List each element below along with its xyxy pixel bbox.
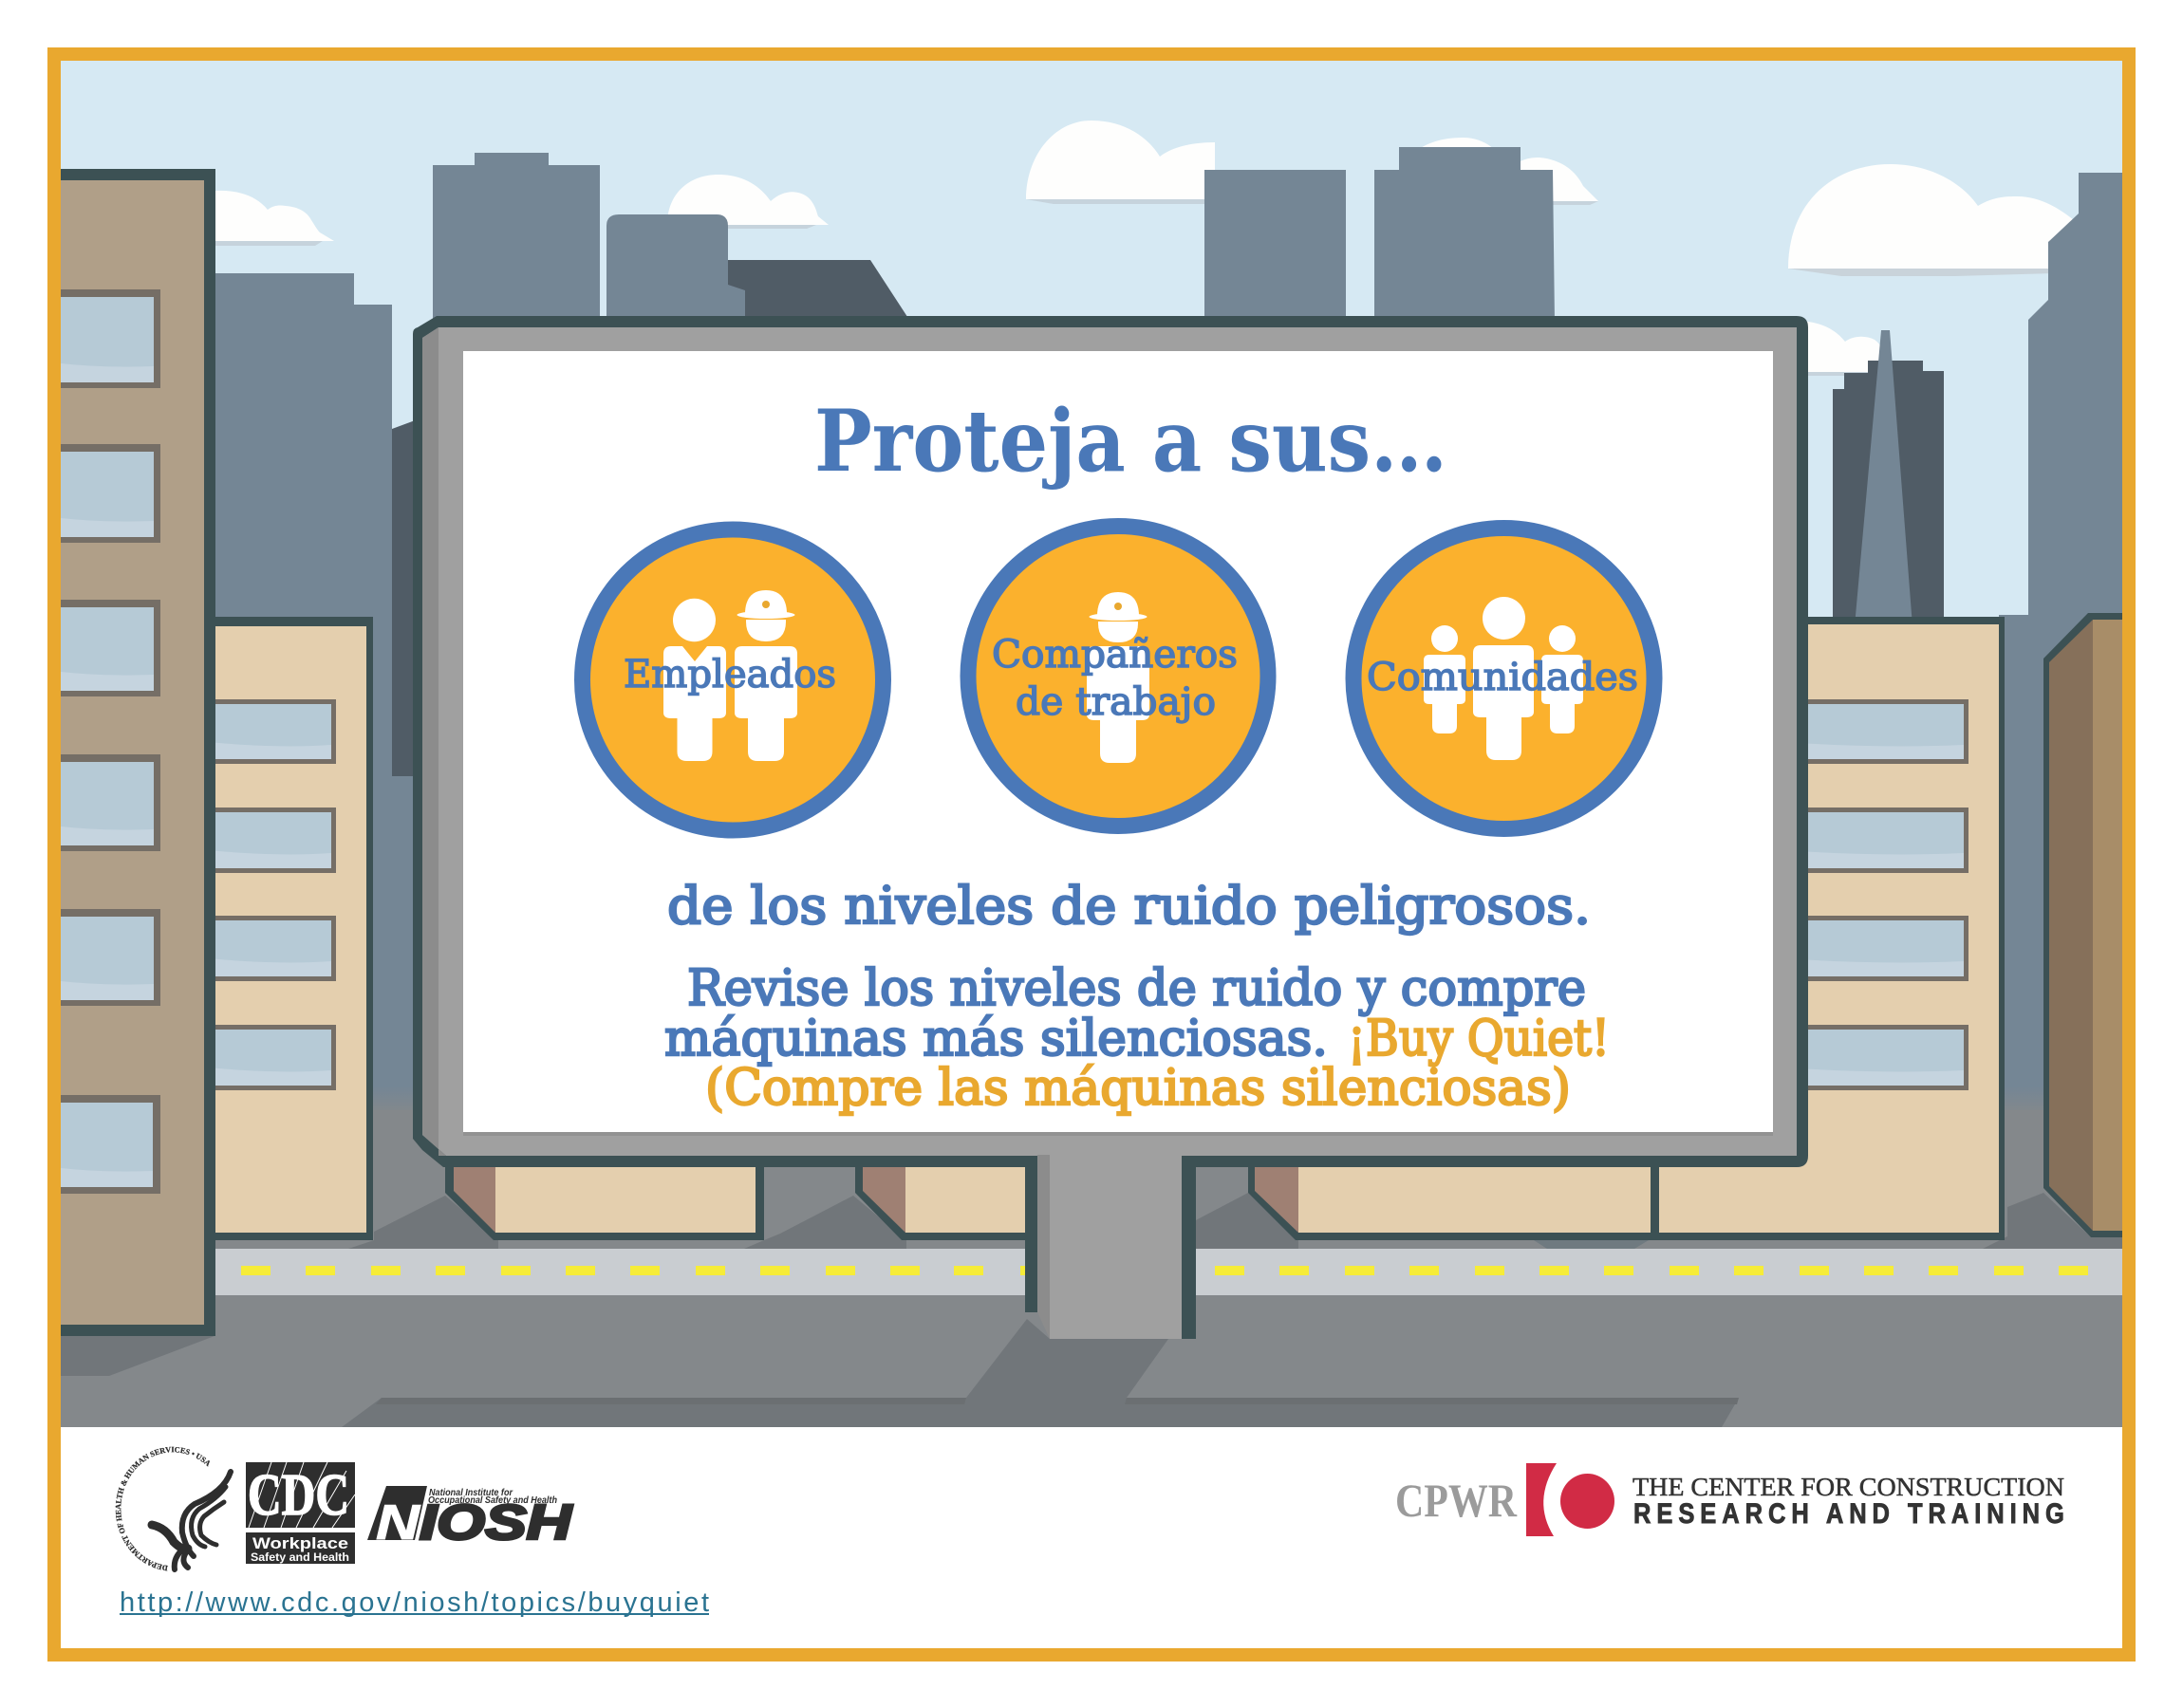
right beige building (1248, 617, 2005, 1240)
billboard title: Proteja a sus… (814, 391, 1447, 492)
road (215, 1249, 2122, 1295)
logo: CDC Workplace Safety and Health (246, 1462, 355, 1564)
ground (61, 1086, 2122, 1427)
pyramid tower (1833, 330, 1944, 626)
right brown building (2043, 613, 2122, 1237)
left beige building windows (209, 699, 336, 1090)
message text: ¡Buy Quiet! (1348, 1011, 1610, 1068)
message text: máquinas más silenciosas. (664, 1011, 1328, 1068)
logo: HHS seal: DEPARTMENT OF HEALTH & HUMAN SERVICES • USA (116, 1446, 210, 1571)
billboard ground shadow (342, 1319, 1739, 1427)
label: Empleados (624, 653, 836, 696)
logo: CDC Workplace Safety and Health: Workplace (252, 1534, 348, 1552)
label: Comunidades (1367, 656, 1638, 699)
building shadows on ground (61, 1193, 2122, 1376)
lower centre-left building (445, 1162, 764, 1240)
label (992, 633, 1238, 724)
logo: CDC Workplace Safety and Health: CDC (248, 1463, 349, 1528)
left brown building windows (61, 289, 160, 1194)
icon: coworker with hard hat (1087, 592, 1149, 763)
road centre dashes (241, 1266, 2088, 1275)
sky (61, 61, 2122, 617)
circle: Comunidades (1353, 528, 1654, 829)
clouds (204, 121, 2074, 376)
right tall tower (1999, 173, 2122, 1110)
logo: NIOSH: Occupational Safety and Health (428, 1494, 557, 1506)
logo: CPWR: THE CENTER FOR CONSTRUCTION (1633, 1473, 2064, 1501)
message text: (Compre las máquinas silenciosas) (705, 1060, 1571, 1117)
label: de trabajo (1016, 680, 1216, 724)
logo: NIOSH: National Institute for (429, 1487, 513, 1498)
logo: NIOSH (367, 1486, 573, 1550)
logo: NIOSH: IOSH (420, 1495, 573, 1550)
icon: group of people (1424, 597, 1583, 760)
logo: CPWR: RESEARCH AND TRAINING (1633, 1497, 2064, 1529)
logo: CDC Workplace Safety and Health: Safety and Health (251, 1552, 349, 1564)
message text: Revise los niveles de ruido y compre (687, 960, 1586, 1017)
URL: http://www.cdc.gov/niosh/topics/buyquiet (120, 1587, 709, 1618)
left brown building (61, 169, 215, 1336)
message text (664, 960, 1610, 1117)
icon: worker without hard hat (663, 599, 726, 761)
circle: Empleados (583, 529, 883, 830)
left beige building (209, 617, 373, 1240)
icon: worker with hard hat (735, 590, 797, 761)
right beige building windows (1808, 699, 1968, 1090)
logo: NIOSH: N (376, 1495, 421, 1550)
billboard post (1025, 1155, 1196, 1339)
illustrated city scene (61, 61, 2122, 1427)
background skyline: left towers (215, 147, 1555, 1110)
circle: Compañeros de trabajo (968, 526, 1268, 826)
billboard frame (413, 316, 1808, 1167)
logo: CPWR: CPWR (1395, 1474, 1518, 1527)
lower centre building (855, 1162, 1030, 1240)
label: Compañeros (992, 633, 1238, 677)
logo: CPWR (1395, 1463, 2064, 1536)
subheading: de los niveles de ruido peligrosos. (667, 876, 1591, 936)
